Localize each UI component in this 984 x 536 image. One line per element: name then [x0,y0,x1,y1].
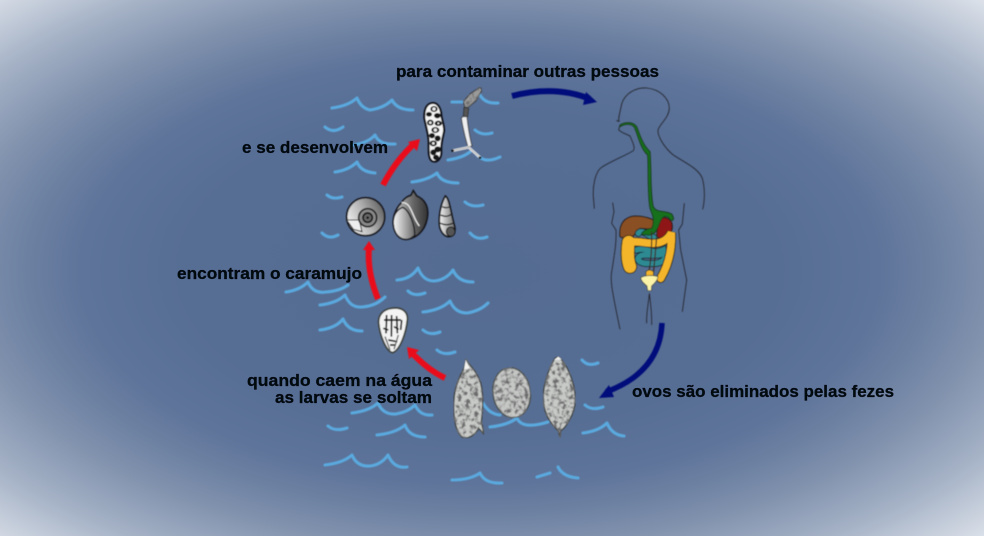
liver [620,216,655,239]
icon: snail shells [347,191,455,239]
icon: sporocyst [424,103,444,162]
icon: round egg [490,365,534,420]
rectum fill [646,270,653,277]
arrow: bottom blue to eggs [599,323,662,398]
bladder [641,276,658,291]
arrow: red eggs to larva [407,347,445,378]
icon: round snail [393,191,428,239]
body outline [593,88,704,329]
stomach [657,218,672,240]
icon: miracidium larva [379,308,407,353]
icon: cercaria [451,87,482,159]
rectum tube [647,228,657,278]
water waves [286,95,624,483]
arrow: top blue to body [512,91,597,105]
icon: tall conical snail [439,196,455,237]
labels [177,63,894,407]
arrow: red larva to snails [363,241,378,299]
icon: egg with lateral spine [454,359,484,438]
colon fill: ascending [628,242,630,267]
colon: transverse and descending [629,233,671,278]
arrow: red snails to sporocyst [383,139,420,185]
colon: ascending [628,242,630,267]
label: encontram o caramujo: encontram o caramujo [177,265,362,283]
icon: flat spiral snail [347,198,385,236]
esophagus [620,123,673,235]
label: e se desenvolvem: e se desenvolvem [242,139,388,157]
colon fill: transverse and descending [629,233,671,278]
small intestine [637,232,665,264]
label: ovos são eliminados pelas fezes: ovos são eliminados pelas fezes [632,383,894,401]
label: as larvas se soltam: as larvas se soltam [275,389,432,407]
icon: spindle egg [543,357,575,437]
label: para contaminar outras pessoas: para contaminar outras pessoas [396,63,659,81]
icon: human body with digestive system [593,88,704,329]
icon: parasite eggs [454,357,575,438]
label: quando caem na água: quando caem na água [247,372,433,390]
